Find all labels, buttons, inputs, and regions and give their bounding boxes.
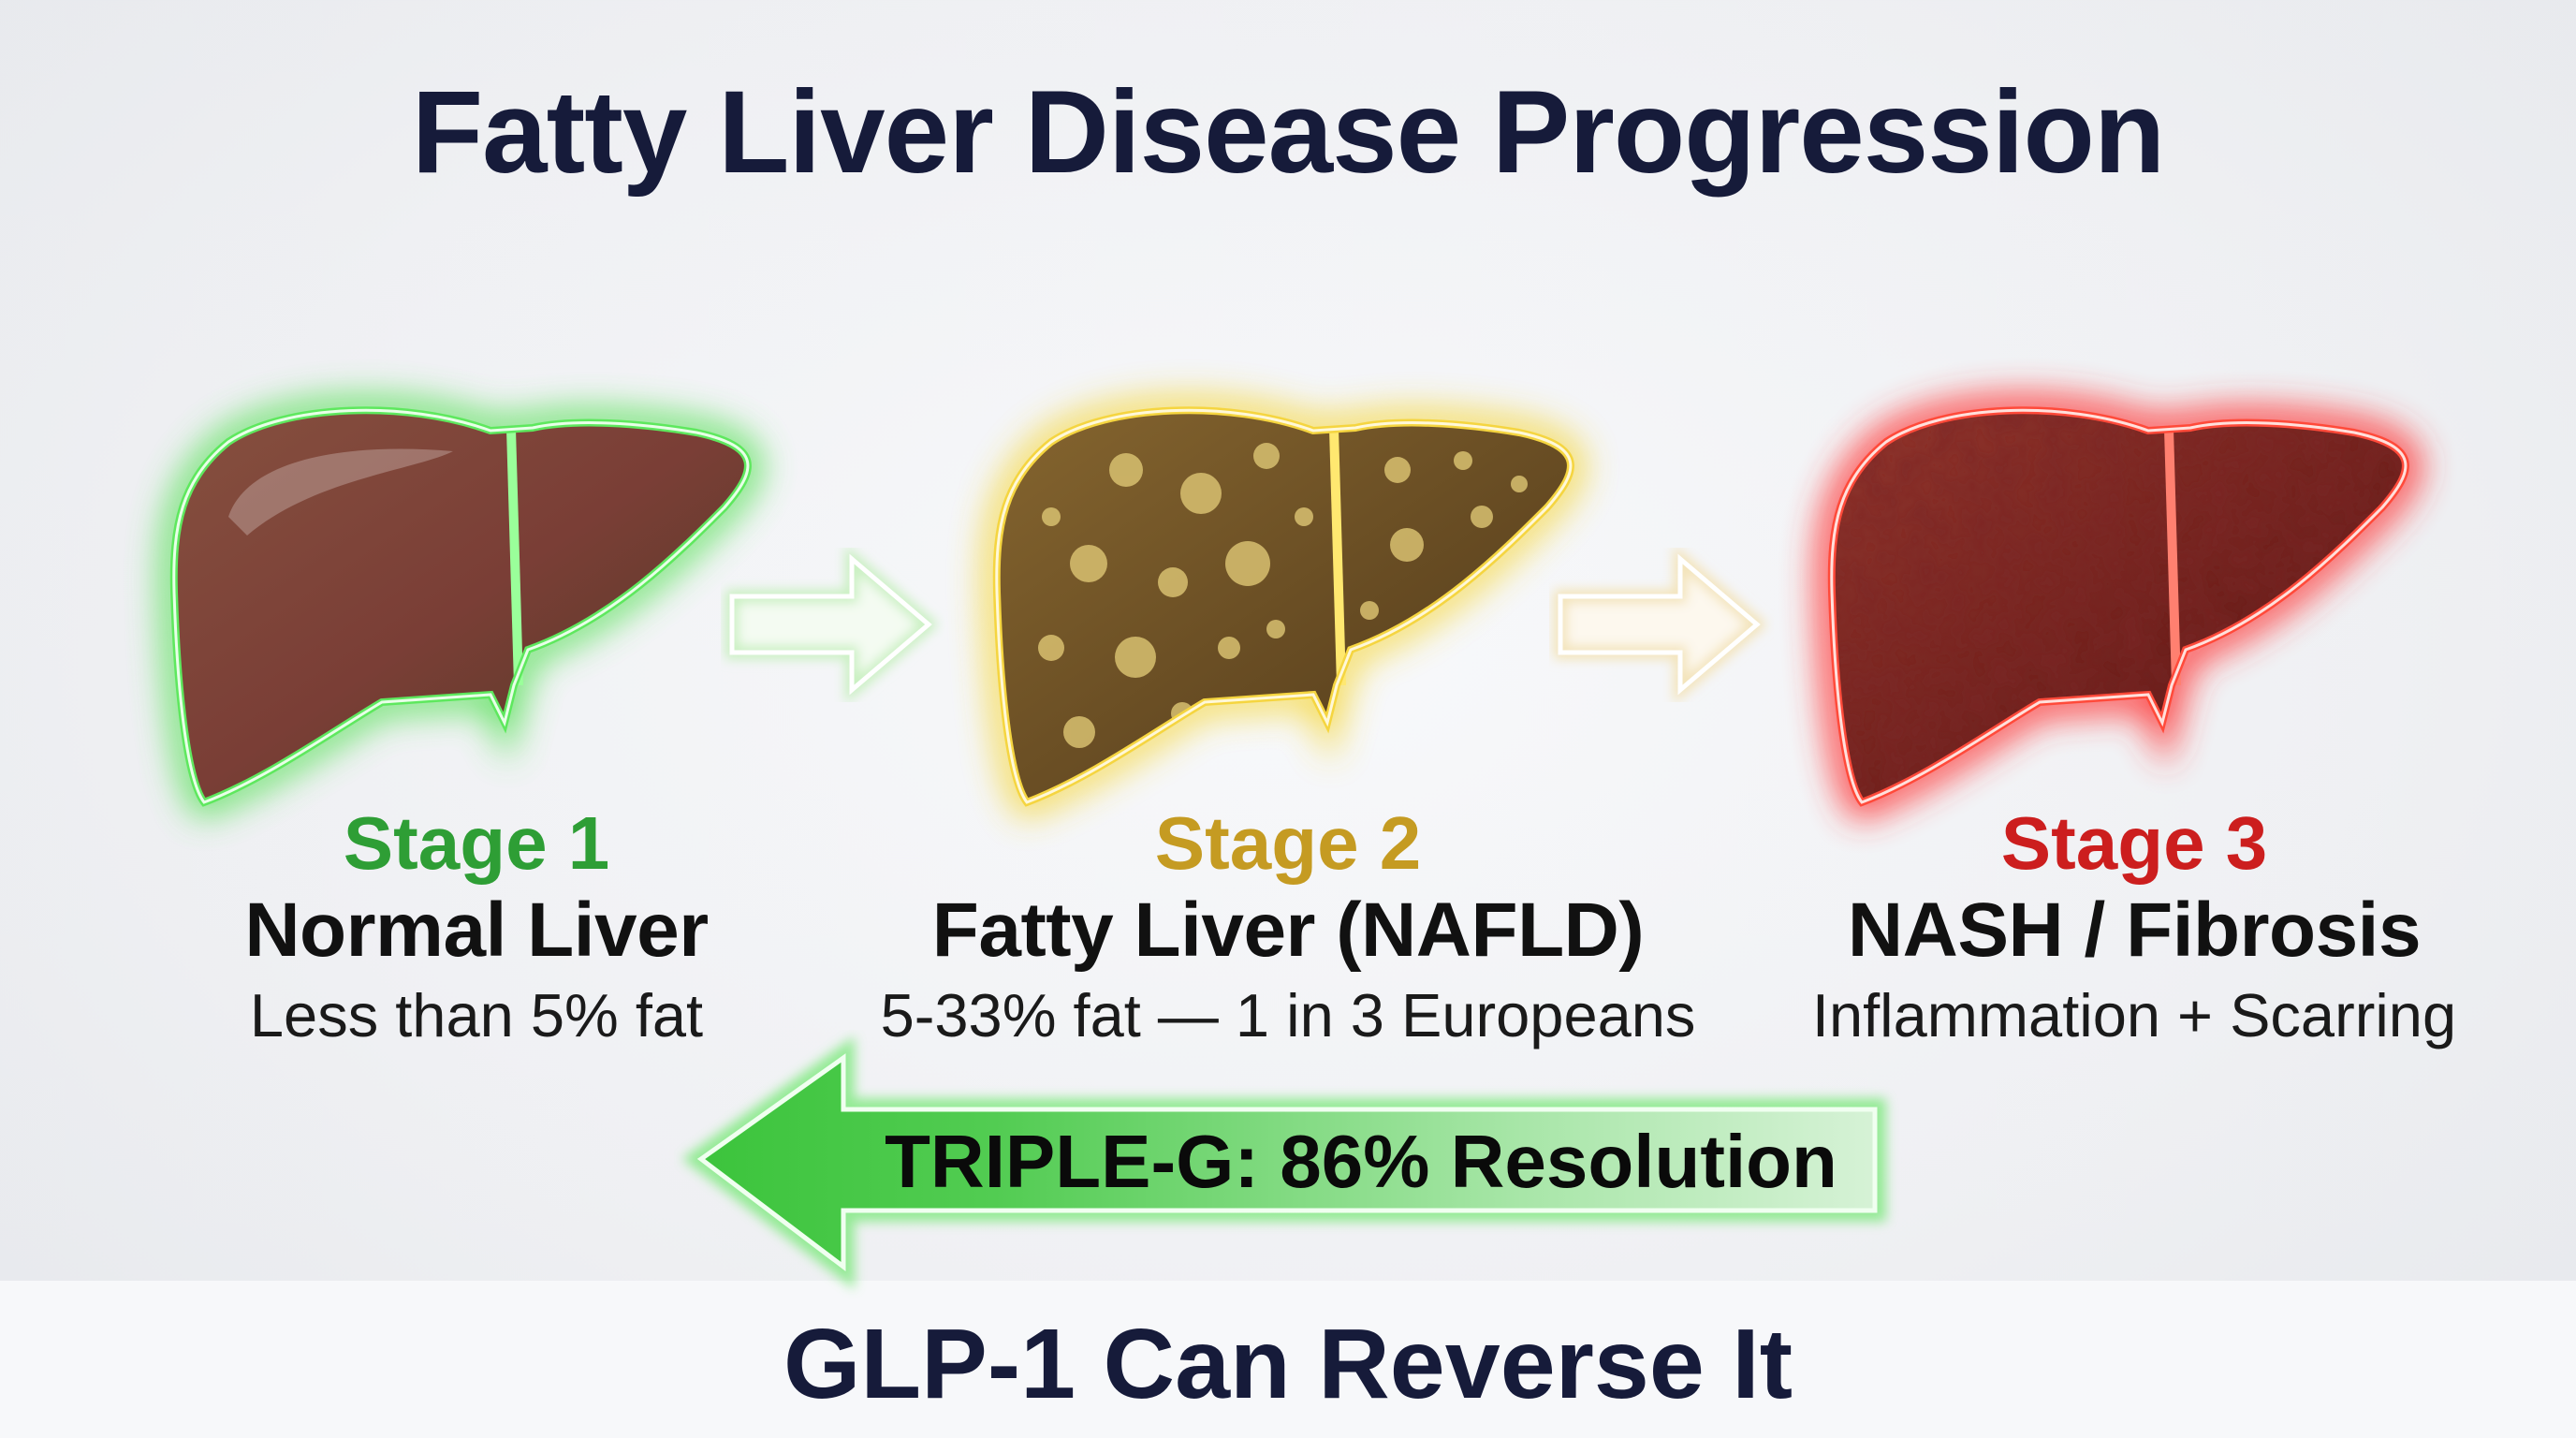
icon: stage 1 normal liver xyxy=(135,371,784,838)
text block: stage 1: Normal Liver xyxy=(244,888,709,973)
title: Fatty Liver Disease Progression xyxy=(412,67,2164,198)
text block: stage 2: Fatty Liver (NAFLD) xyxy=(932,888,1644,973)
arrow: stage 2 to 3 xyxy=(1549,548,1769,702)
text block: stage 2 xyxy=(881,801,1695,1049)
text block: stage 2: Stage 2 xyxy=(1155,801,1421,885)
callout: reverse arrow TRIPLE-G xyxy=(680,1034,1894,1292)
bottom band xyxy=(0,1281,2576,1438)
text block: stage 1 xyxy=(244,801,709,1049)
icon: stage 3 NASH liver xyxy=(1788,367,2447,843)
text block: stage 3: Inflammation + Scarring xyxy=(1812,981,2456,1049)
text block: stage 1: Stage 1 xyxy=(344,801,609,885)
text block: stage 2: 5-33% fat — 1 in 3 Europeans xyxy=(881,981,1695,1049)
text block: stage 3: NASH / Fibrosis xyxy=(1848,888,2421,973)
text block: stage 3: Stage 3 xyxy=(2001,801,2267,885)
text block: stage 3 xyxy=(1812,801,2456,1049)
icon: stage 2 fatty liver xyxy=(956,369,1609,840)
text block: stage 1: Less than 5% fat xyxy=(250,981,703,1049)
arrow: stage 1 to 2 xyxy=(721,548,940,702)
callout text: TRIPLE-G: 86% Resolution xyxy=(885,1120,1837,1203)
footer heading: GLP-1 Can Reverse It xyxy=(783,1309,1793,1419)
